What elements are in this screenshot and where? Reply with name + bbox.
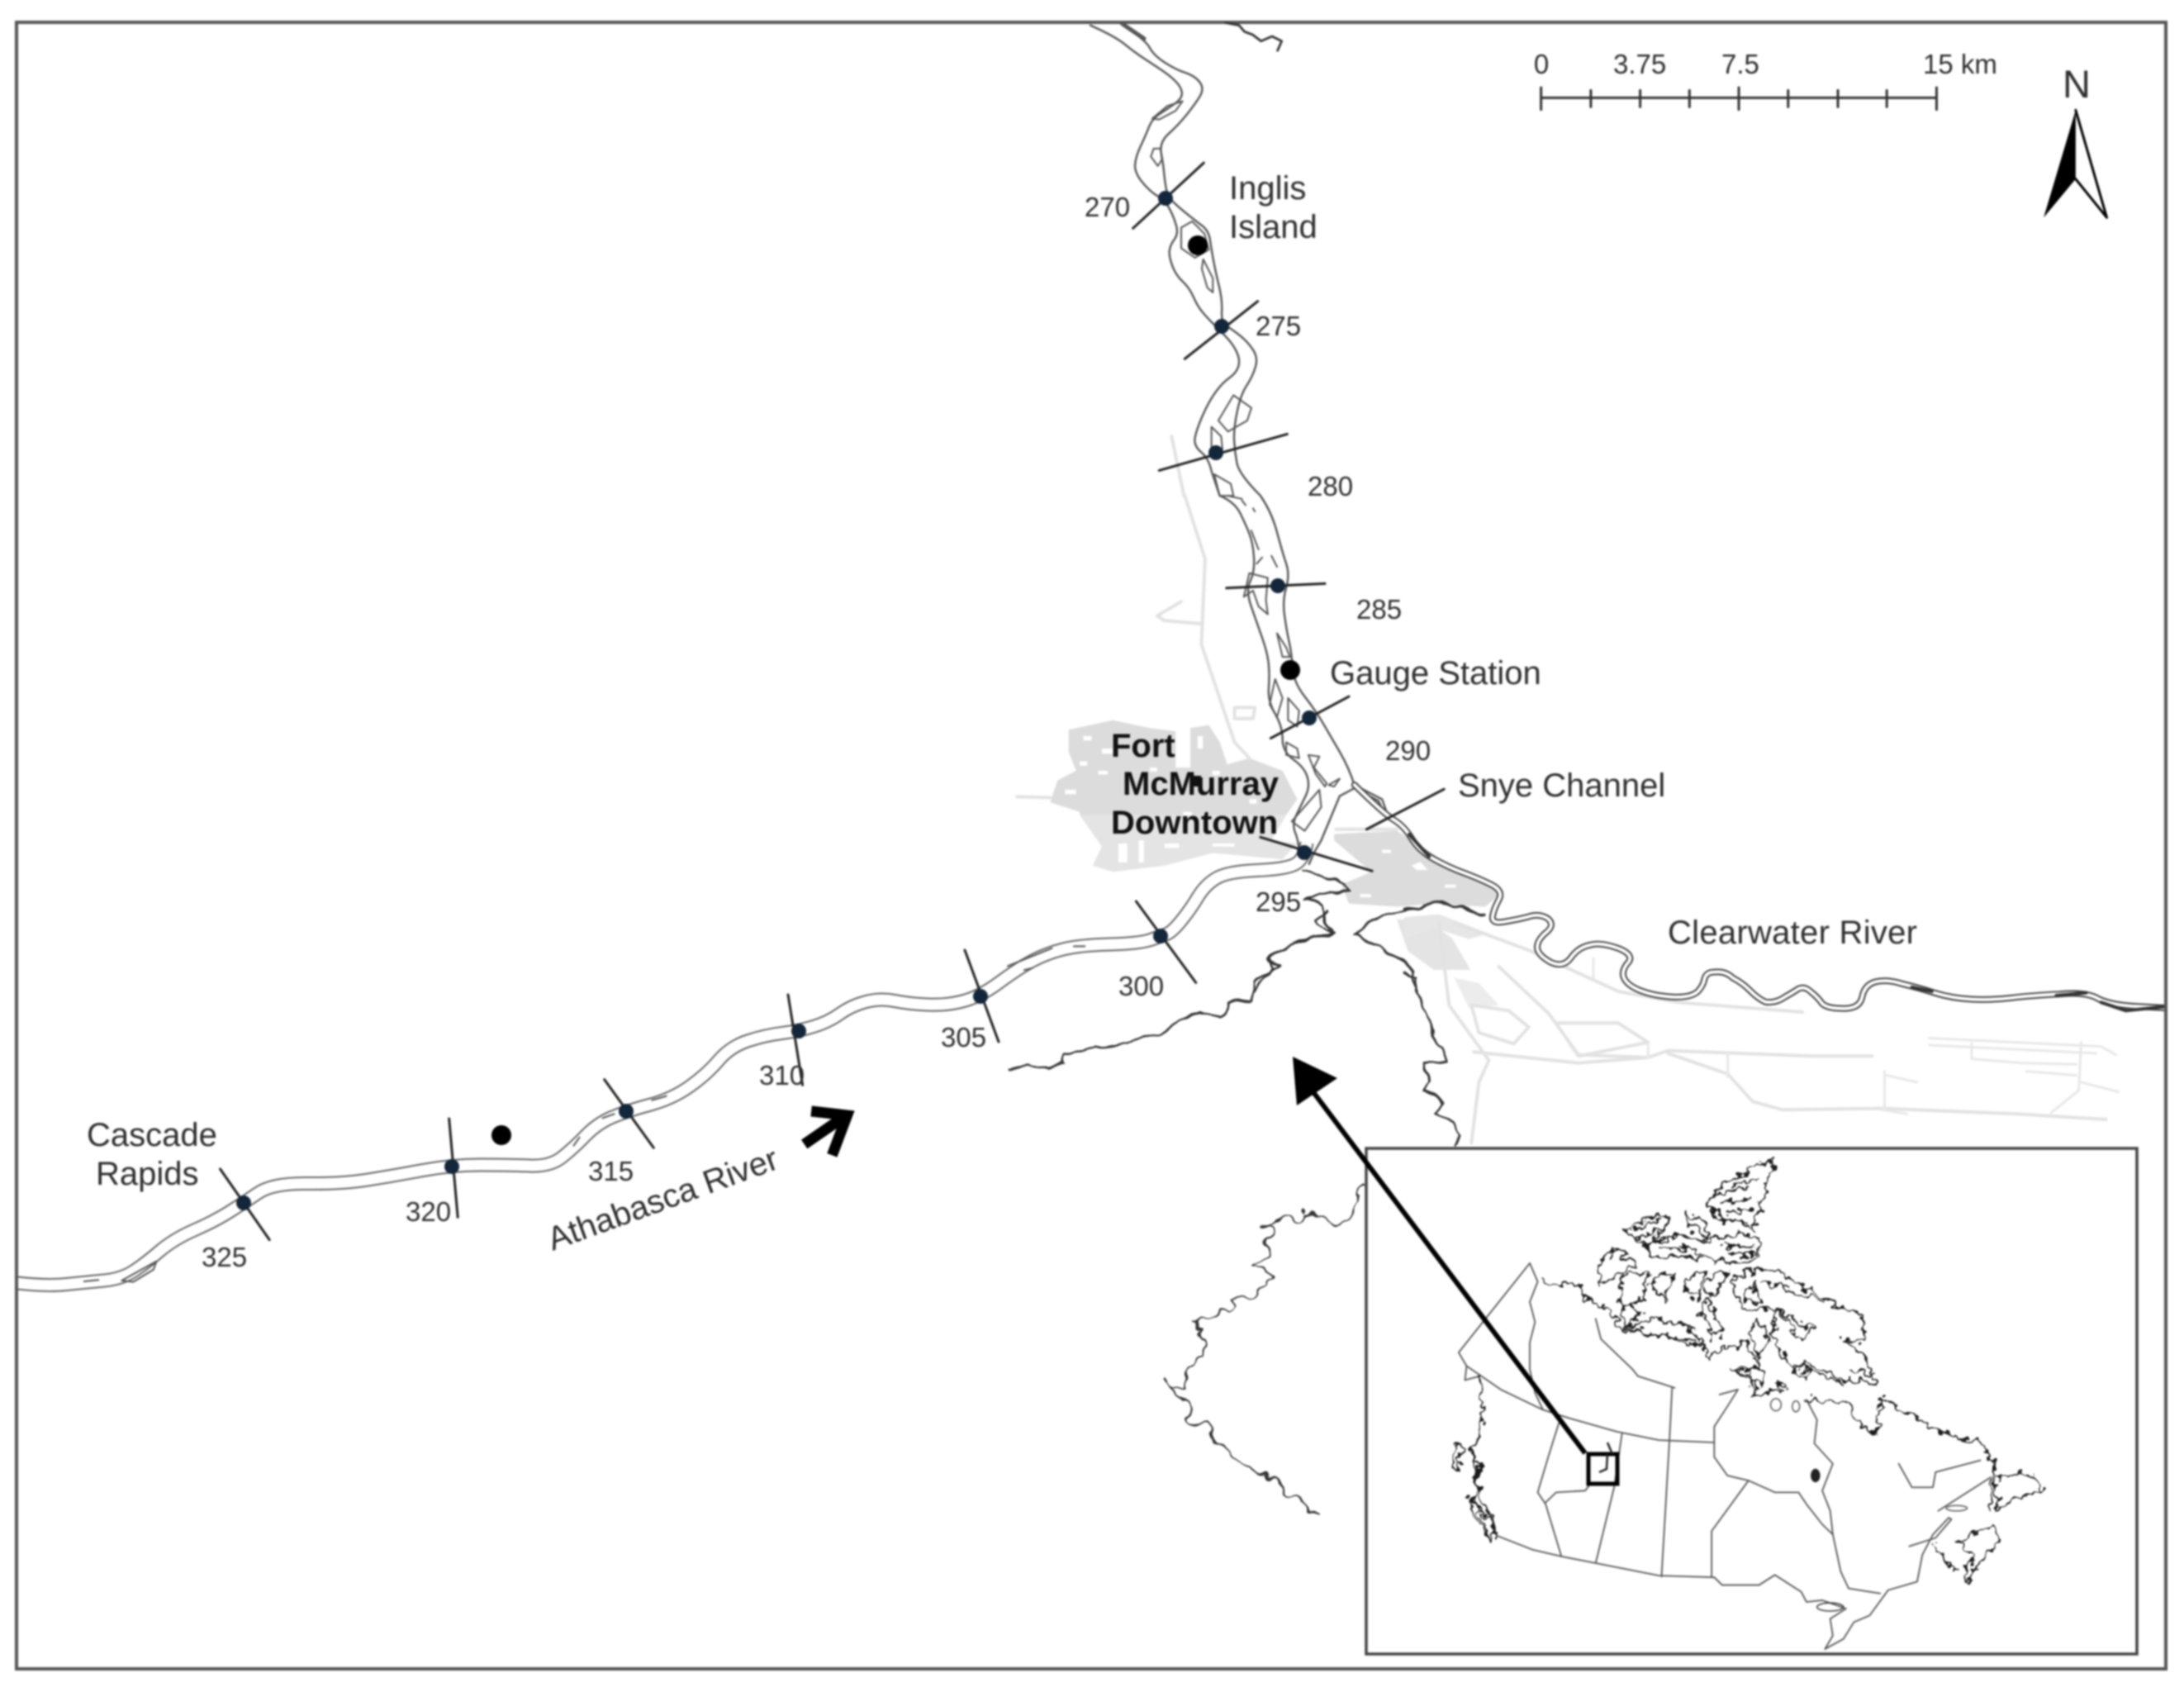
river kilometre markers 285 to 300 <box>1136 583 1372 982</box>
label: Cascade Rapids: Rapids <box>96 1156 199 1192</box>
scale bar <box>1534 49 1997 110</box>
scale bar: 7.5 <box>1721 49 1759 79</box>
scale bar: 0 <box>1534 49 1549 79</box>
roads north of town <box>1171 436 1184 496</box>
kilometre labels: 305 <box>941 1022 986 1053</box>
kilometre labels: 295 <box>1256 886 1301 917</box>
label: Inglis Island: Inglis <box>1229 170 1306 207</box>
kilometre labels: 275 <box>1256 311 1301 341</box>
study site dots <box>491 235 1300 1145</box>
kilometre labels: 270 <box>1085 192 1130 222</box>
kilometre labels: 320 <box>406 1196 451 1227</box>
arrow: inset to study area <box>1293 1057 1585 1453</box>
jagged coasts and Arctic islands <box>1454 1160 2044 1581</box>
scale bar: 15 km <box>1923 49 1997 79</box>
panel: Canada inset map <box>1366 1148 2137 1654</box>
kilometre labels: 315 <box>588 1156 634 1186</box>
kilometre labels: 325 <box>202 1242 247 1272</box>
north arrow <box>2044 62 2107 217</box>
scale bar: 3.75 <box>1613 49 1666 79</box>
north arrow: N <box>2063 62 2091 106</box>
kilometre labels: 285 <box>1356 594 1402 625</box>
tributary streams <box>1010 23 1484 1513</box>
provincial borders <box>1459 1263 1981 1594</box>
Fort McMurray urban area <box>1017 496 1503 970</box>
Hudson Bay and southern coast <box>1714 1390 1991 1649</box>
label: Gauge Station: Gauge Station <box>1330 655 1541 692</box>
label: Cascade Rapids: Cascade <box>87 1117 217 1153</box>
label: Fort McMurray Downtown: McMurray <box>1123 766 1280 802</box>
kilometre labels <box>202 192 1431 1272</box>
river kilometre markers 310 to 325 <box>221 995 803 1240</box>
label: Athabasca River: Athabasca River <box>543 1141 783 1257</box>
Athabasca River lower reach <box>8 843 1307 1285</box>
label: Clearwater River: Clearwater River <box>1668 915 1917 951</box>
Snye Channel leader line <box>1336 789 1444 829</box>
kilometre labels: 310 <box>759 1060 805 1091</box>
roads south of Clearwater River <box>1404 915 2119 1143</box>
arrow: river flow direction <box>805 1111 847 1155</box>
kilometre labels: 300 <box>1118 971 1164 1001</box>
kilometre labels: 280 <box>1308 471 1353 501</box>
marker nodes on river <box>236 191 1317 1210</box>
locator box river detail <box>1599 1442 1612 1472</box>
kilometre labels: 290 <box>1385 735 1431 766</box>
Athabasca River upper reach with islands <box>1090 24 1388 864</box>
label: Snye Channel: Snye Channel <box>1458 768 1665 804</box>
river kilometre markers 270 to 280 <box>1133 163 1287 470</box>
river kilometre markers 305 <box>965 950 999 1042</box>
lakes and bay islands <box>1771 1399 1968 1611</box>
icon: downtown marker <box>1190 776 1201 787</box>
Clearwater River <box>1355 785 2166 1010</box>
label: Fort McMurray Downtown: Fort <box>1111 728 1175 764</box>
label: Inglis Island: Island <box>1229 209 1318 245</box>
label: Fort McMurray Downtown: Downtown <box>1111 805 1278 841</box>
locator box on inset <box>1588 1454 1617 1484</box>
